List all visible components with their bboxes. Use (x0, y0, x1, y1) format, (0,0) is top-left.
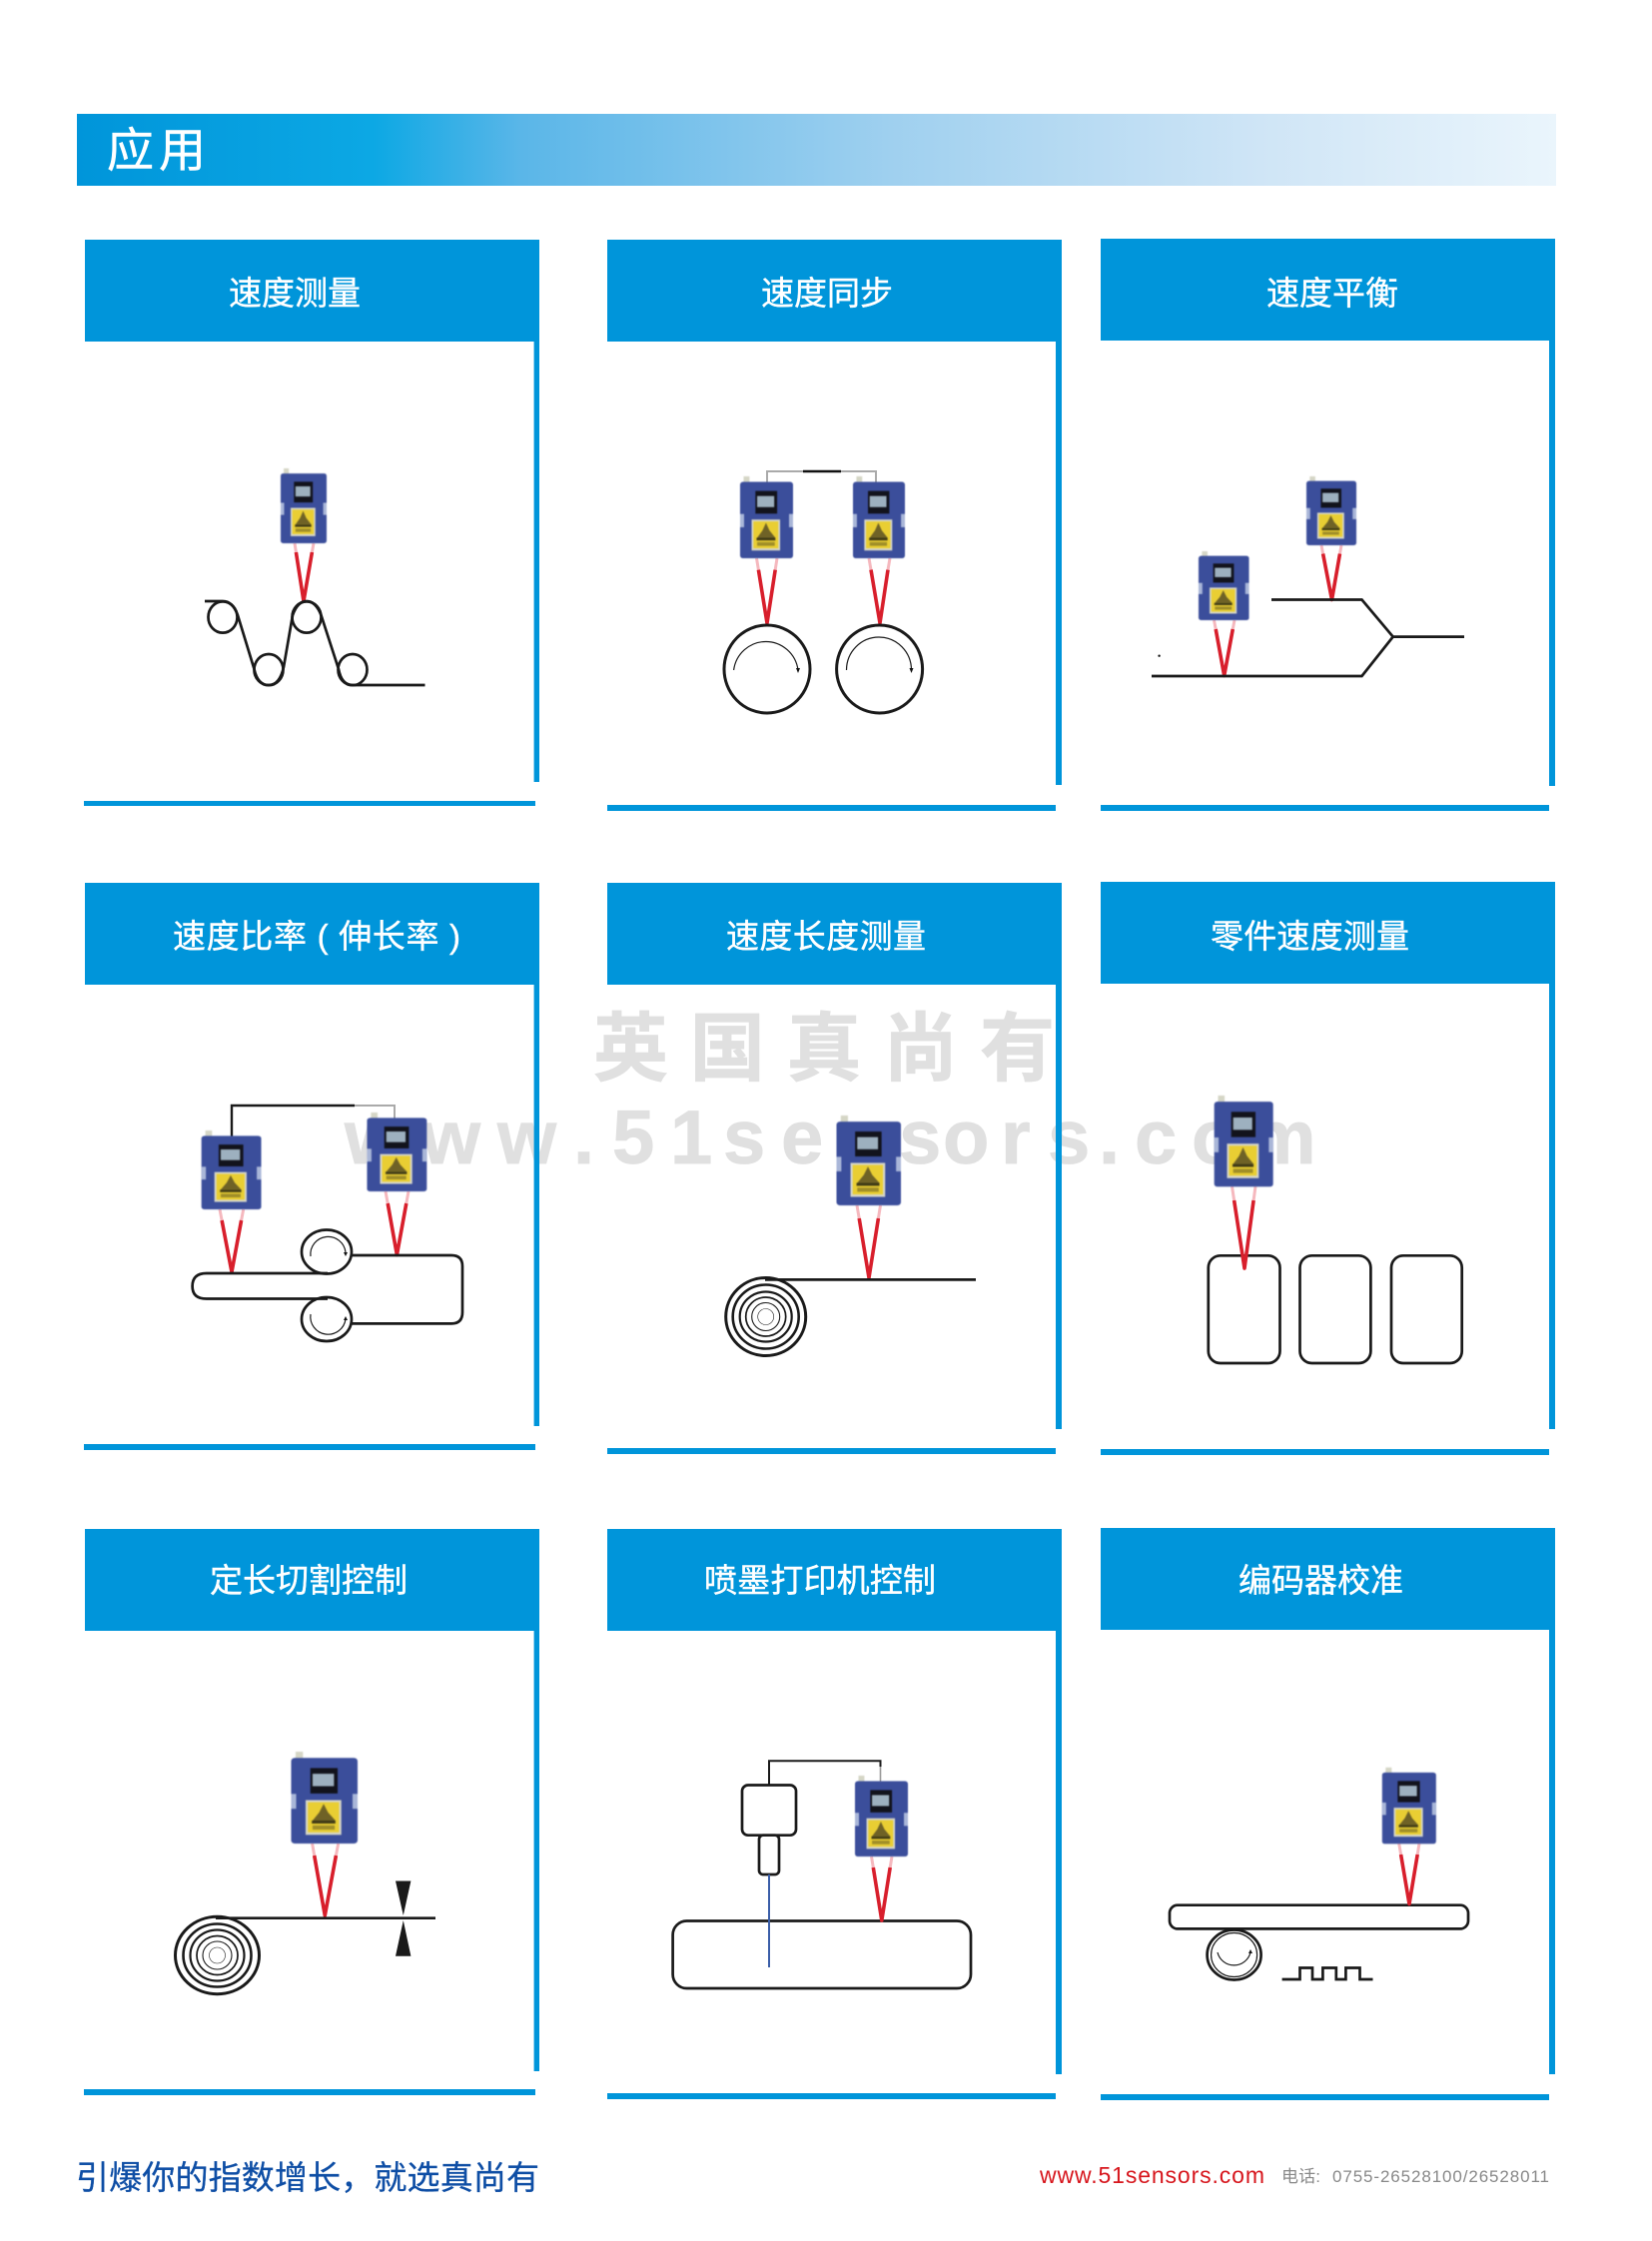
panel header (607, 240, 1062, 342)
cut markers (396, 1881, 411, 1956)
footer website: www.51sensors.com (1039, 2162, 1264, 2188)
sensor (281, 468, 327, 543)
encoder wheel (1208, 1929, 1261, 1979)
ink jet (768, 1874, 770, 1967)
panel header: 定长切割控制 (210, 1562, 408, 1599)
watermark: 英国真尚有 (593, 988, 1055, 1097)
panel header (1101, 882, 1555, 984)
laser beam (871, 1857, 892, 1920)
sensor (855, 1776, 908, 1857)
panel border (607, 1529, 1062, 2099)
laser beam (1233, 1186, 1255, 1268)
laser beam (1399, 1844, 1419, 1903)
laser beam (295, 543, 314, 601)
panel border (1101, 239, 1555, 811)
footer contact: 0755-26528100/26528011 (1332, 2167, 1549, 2186)
panel header (85, 1529, 539, 1631)
panel header: 速度长度测量 (726, 918, 926, 955)
panel header: 速度同步 (761, 275, 893, 312)
panel border (84, 883, 539, 1450)
panel header: 速度平衡 (1266, 275, 1398, 312)
panel header: 速度比率 ( 伸长率 ) (173, 918, 460, 955)
web over rollers (205, 601, 425, 685)
panel header (1101, 1528, 1555, 1630)
panel header (607, 883, 1062, 985)
sensor left (740, 476, 793, 558)
sensor right (367, 1113, 426, 1191)
pulse signal (1282, 1967, 1372, 1979)
laser beam (857, 1205, 881, 1278)
panel: cut to length control (84, 1529, 539, 2095)
laser beams (757, 558, 890, 623)
coil of material (176, 1916, 435, 1994)
sensor right (853, 476, 905, 558)
sensor (837, 1116, 901, 1205)
sensor left (202, 1130, 262, 1209)
watermark (344, 988, 1316, 1180)
rollers (724, 625, 923, 713)
panel border (84, 1529, 539, 2095)
footer slogan: 引爆你的指数增长，就选真尚有 (76, 2159, 539, 2196)
title banner (77, 114, 1556, 186)
sensor upper (1306, 476, 1356, 545)
coil of material (726, 1278, 976, 1356)
merging lines (1152, 599, 1464, 676)
panel border (607, 240, 1062, 811)
footer contact: 电话: (1281, 2167, 1320, 2186)
sensor lower (1199, 551, 1249, 620)
laser beams (220, 1191, 409, 1272)
laser beams (1215, 545, 1341, 676)
connecting cable (232, 1106, 395, 1136)
panel: speed synchronisation (607, 240, 1062, 811)
panel header: 喷墨打印机控制 (704, 1562, 936, 1599)
panel: speed ratio (84, 883, 539, 1450)
printer cable (769, 1761, 881, 1786)
panel border (84, 240, 539, 806)
panel: inkjet printer control (607, 1529, 1062, 2099)
panel header: 编码器校准 (1239, 1562, 1403, 1599)
panel: encoder calibration (1101, 1528, 1555, 2100)
panel: part speed measurement (1101, 882, 1555, 1455)
panel: speed balance (1101, 239, 1555, 811)
panel header: 速度测量 (229, 275, 361, 312)
panel header (1101, 239, 1555, 341)
sensor (1382, 1768, 1436, 1844)
web loop with rollers (193, 1230, 462, 1341)
parts (1209, 1255, 1462, 1363)
watermark: www.51sensors.com (344, 1096, 1316, 1180)
panel: speed and length measurement (607, 883, 1062, 1454)
panel header (85, 240, 539, 342)
title banner: 应用 (107, 124, 206, 177)
conveyor belt (1170, 1905, 1468, 1928)
product (673, 1921, 971, 1988)
panel border (1101, 882, 1555, 1455)
panel border (607, 883, 1062, 1454)
connecting cable (767, 471, 876, 483)
panel header (85, 883, 539, 985)
panel header (607, 1529, 1062, 1631)
panel: speed measurement (84, 240, 539, 806)
laser beam (313, 1844, 339, 1915)
sensor (1215, 1096, 1273, 1186)
sensor (292, 1752, 358, 1844)
print head (742, 1786, 796, 1874)
panel border (1101, 1528, 1555, 2100)
panel header: 零件速度测量 (1211, 918, 1409, 955)
